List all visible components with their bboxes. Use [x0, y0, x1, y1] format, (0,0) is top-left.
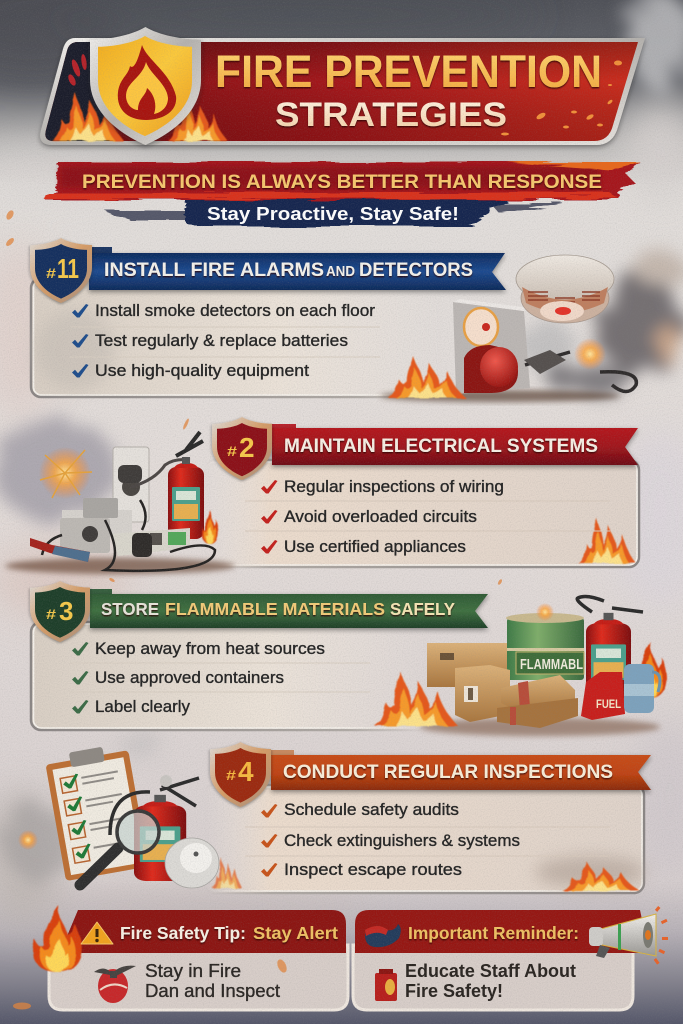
spark: [574, 338, 606, 370]
panel 2 checklist: Avoid overloaded circuits: [284, 508, 477, 526]
header embers: [501, 60, 622, 136]
wall outlet plate: [113, 447, 149, 522]
panel 2 illustration: [5, 432, 235, 574]
magnifier: [80, 848, 118, 885]
panel 3: store flammable materials safely: [30, 581, 666, 736]
header panel: [40, 38, 645, 145]
panel 2 badge: #: [227, 443, 237, 459]
reminder text: [405, 961, 576, 1001]
panel 3 checklist: Use approved containers: [95, 669, 284, 687]
panel 3 checklist: Label clearly: [95, 698, 191, 716]
tip heading: [120, 923, 338, 943]
panel 1 badge: #: [46, 265, 56, 281]
clamp: [30, 538, 90, 562]
panel 1 checklist: Test regularly & replace batteries: [95, 332, 348, 350]
tip text: Stay in Fire: [145, 961, 241, 981]
panel 2 heading: MAINTAIN ELECTRICAL SYSTEMS: [284, 436, 598, 457]
sub-slogan brush banner: Stay Proactive, Stay Safe!: [207, 203, 459, 224]
panel 3 heading: [101, 599, 455, 619]
panel 1 checklist: Use high-quality equipment: [95, 362, 309, 380]
panel 3 checklist: Keep away from heat sources: [95, 640, 325, 658]
panel 2 badge: 2: [239, 432, 255, 463]
extinguisher: [586, 613, 631, 699]
title: FIRE PREVENTION: [215, 46, 602, 97]
panel 4 badge: #: [226, 767, 236, 783]
panel 3 ribbon: [90, 589, 488, 628]
panel 2 dividers: [245, 501, 610, 531]
panel 3 illustration: FUEL: [596, 699, 621, 711]
tip card body: [49, 945, 348, 1010]
detector: [165, 838, 219, 888]
red leaves: [67, 54, 88, 87]
sub-slogan brush banner: [105, 200, 566, 226]
plug hose: [131, 460, 190, 487]
panel 4 badge: 4: [238, 756, 254, 787]
warning icon: [81, 922, 113, 944]
header flames: [52, 92, 228, 141]
panel 3 dividers: [70, 663, 370, 692]
panel 1 heading: AND: [326, 263, 355, 280]
panel 4 checklist: Check extinguishers & systems: [284, 832, 520, 850]
panel 2 badge: [212, 417, 272, 480]
bowl icon: [365, 924, 401, 947]
reminder card body: [353, 945, 633, 1010]
panel 3 heading: STORE: [101, 599, 159, 619]
panel 3 card: [31, 622, 427, 730]
panel 3 badge: 3: [59, 596, 73, 626]
panel 4 badge: [210, 742, 271, 807]
flammable drum: [507, 618, 584, 680]
tip header: [60, 910, 346, 953]
tip heading: Fire Safety Tip:: [120, 923, 246, 943]
important reminder panel: [353, 906, 668, 1010]
panel 3 heading: FLAMMABLE MATERIALS: [165, 599, 385, 619]
slogan banner: [44, 162, 640, 200]
panel 4 ribbon: [271, 750, 651, 790]
spark lines: [40, 450, 92, 498]
boxes: [427, 643, 507, 687]
tip text: [145, 961, 280, 1001]
flame behind extinguisher: [202, 510, 218, 544]
panel 3 badge: #: [46, 606, 56, 622]
panel 1 smoke inside: [35, 310, 115, 390]
clipboard: [44, 742, 149, 881]
panel 1 flames: [388, 356, 466, 398]
blue jug: [624, 664, 654, 713]
tip text: Dan and Inspect: [145, 981, 280, 1001]
flame icon: [33, 905, 82, 972]
panel 4: conduct regular inspections: [18, 742, 651, 893]
panel 1 illustration: [380, 252, 683, 402]
scattered embers: [5, 209, 503, 1010]
panel 2 ribbon: [272, 424, 638, 465]
spark on drum: [536, 603, 554, 621]
panel 1 card: [31, 278, 442, 397]
panel 3 checklist: [72, 640, 325, 716]
main shield with flame icon: [90, 27, 201, 145]
panel 1 heading: DETECTORS: [359, 260, 473, 281]
panel 1 ribbon: [89, 247, 506, 290]
reminder heading: Important Reminder:: [408, 923, 579, 943]
panel 4 heading: CONDUCT REGULAR INSPECTIONS: [283, 762, 613, 783]
reminder icon: [375, 969, 397, 1001]
title: [215, 46, 602, 134]
reminder header: [355, 910, 649, 953]
panel 4 checklist: Inspect escape routes: [284, 861, 462, 879]
panel 3 badge: [30, 581, 90, 642]
cables: [42, 500, 215, 571]
panel 1 badge: [30, 238, 92, 303]
slogan text: PREVENTION IS ALWAYS BETTER THAN RESPONSE: [82, 171, 602, 193]
reminder text: Fire Safety!: [405, 981, 503, 1001]
panel 4 illustration: [18, 742, 219, 888]
panel 1 checklist: [72, 302, 376, 380]
panel 1 checklist: Install smoke detectors on each floor: [95, 302, 376, 320]
tip icon: [94, 966, 136, 1003]
panel 3 flames: [374, 672, 458, 726]
title: STRATEGIES: [275, 96, 507, 134]
panel 1 heading: INSTALL FIRE ALARMS: [104, 260, 324, 281]
panel 2 card: [205, 460, 639, 567]
panel 2 checklist: [261, 478, 504, 556]
panel 3 heading: SAFELY: [390, 599, 455, 619]
panel 4 smoke and flames: [212, 856, 645, 891]
panel 2 checklist: Regular inspections of wiring: [284, 478, 504, 496]
panel 2 checklist: Use certified appliances: [284, 538, 466, 556]
reminder text: Educate Staff About: [405, 961, 576, 981]
panel 3 illustration: FLAMMABL: [520, 656, 583, 673]
megaphone icon: [589, 906, 668, 965]
panel 3 illustration: [374, 597, 666, 736]
tip heading: Stay Alert: [253, 923, 338, 943]
panel 1 dividers: [70, 327, 380, 357]
plug and cable: [525, 352, 636, 392]
panel 4 checklist: Schedule safety audits: [284, 801, 459, 819]
panel 4 card: [205, 785, 644, 893]
fuel can: [581, 672, 625, 720]
panel 2 flames: [578, 518, 636, 563]
smoke detector: [521, 273, 609, 323]
extinguisher: [134, 795, 186, 881]
alarm box: [453, 302, 530, 394]
dark left end of header: [45, 42, 110, 141]
panel 2: maintain electrical systems: [5, 417, 639, 574]
panel 1: install fire alarms and detectors: [30, 238, 683, 402]
power strips: [60, 518, 110, 553]
panel 1 badge: 11: [57, 253, 79, 284]
panel 4 dividers: [245, 827, 610, 856]
extinguisher: [168, 457, 204, 539]
fire safety tip panel: [33, 905, 348, 1010]
panel 4 checklist: [261, 801, 520, 879]
panel 1 heading: [104, 260, 473, 281]
